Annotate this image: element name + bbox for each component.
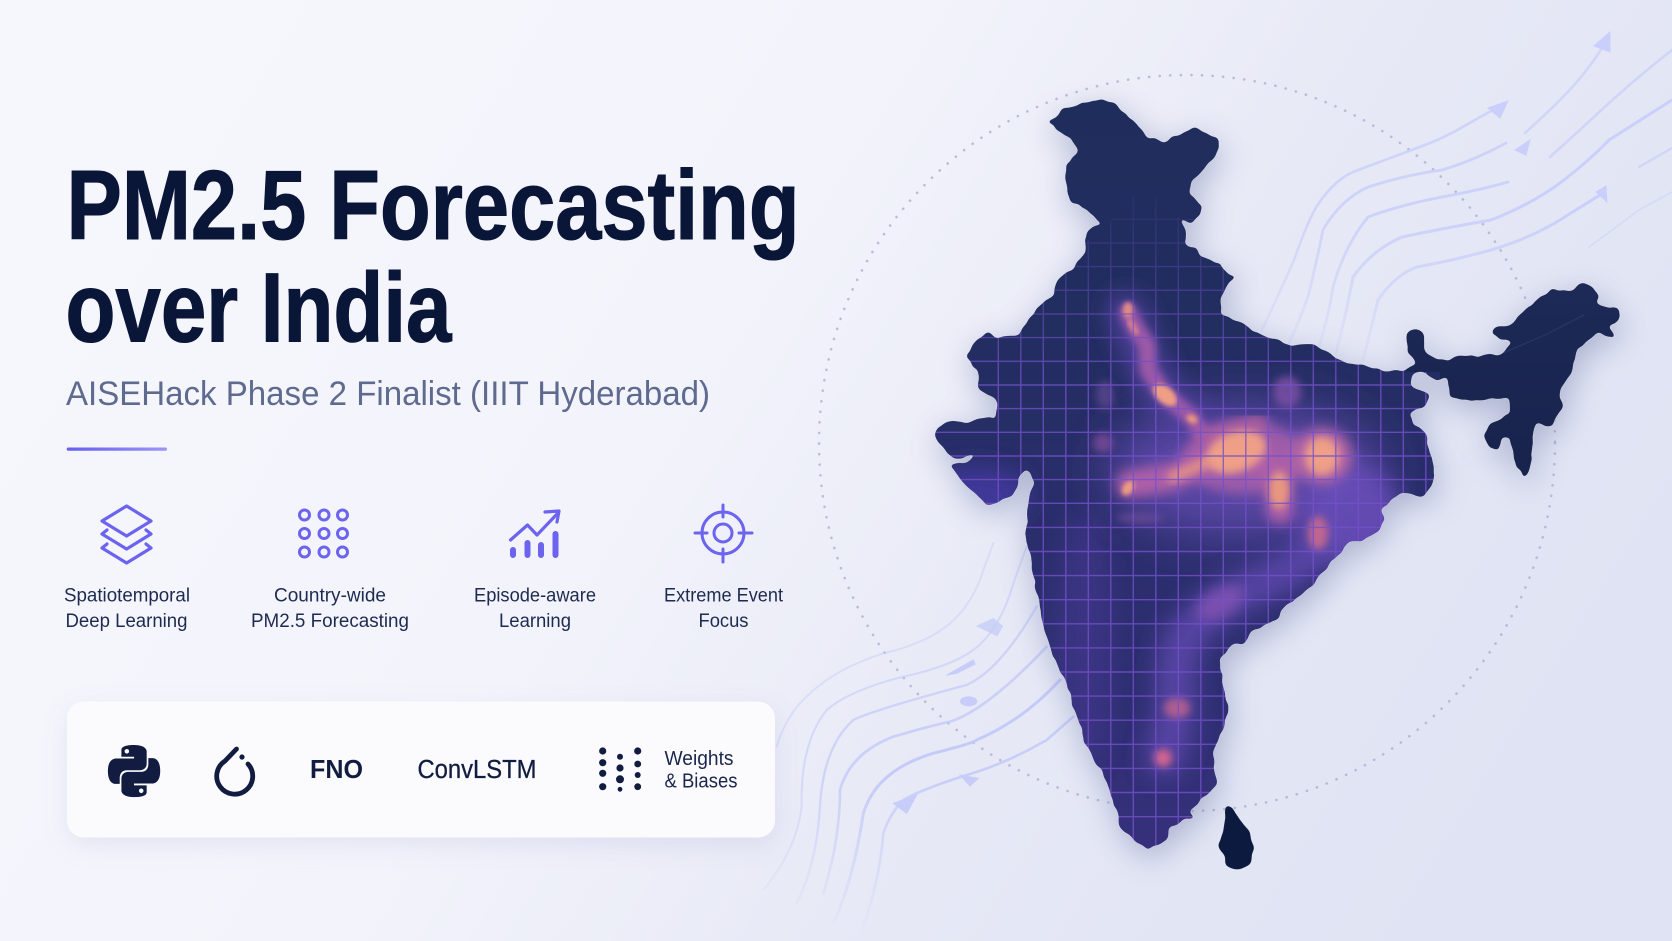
feature: episode-aware learning <box>474 511 596 632</box>
feature: spatiotemporal deep learning: Spatiotemporal <box>64 586 190 606</box>
label: weights and biases: & Biases <box>664 771 738 793</box>
feature: country-wide forecasting: PM2.5 Forecasting <box>251 611 409 632</box>
title <box>66 150 800 363</box>
map edge highlight <box>933 99 1620 850</box>
icon: stacked layers <box>102 506 151 563</box>
icon: rising chart <box>510 511 559 555</box>
feature: spatiotemporal deep learning <box>64 506 190 632</box>
dotted orbit circle <box>819 75 1555 811</box>
icon: python <box>108 745 160 797</box>
icon: weights and biases dots <box>599 747 641 792</box>
feature: extreme event focus: Focus <box>698 611 748 632</box>
feature: extreme event focus <box>664 505 784 632</box>
icon: dot grid <box>300 510 348 557</box>
label: weights and biases <box>664 748 738 793</box>
wind streamlines: south-west <box>763 543 1073 937</box>
Sri Lanka <box>1221 808 1254 869</box>
icon: pytorch <box>217 749 253 794</box>
map shadow <box>936 108 1623 859</box>
feature: country-wide forecasting: Country-wide <box>274 586 386 606</box>
accent rule <box>67 448 167 451</box>
north-east region <box>1406 284 1620 476</box>
feature: episode-aware learning: Episode-aware <box>474 586 596 606</box>
feature: extreme event focus: Extreme Event <box>664 586 784 606</box>
tools card <box>67 702 775 838</box>
subtitle: AISEHack Phase 2 Finalist (IIIT Hyderabad) <box>66 375 710 413</box>
feature: country-wide forecasting <box>251 510 409 632</box>
feature: spatiotemporal deep learning: Deep Learning <box>66 611 188 632</box>
wind streamlines: north-east <box>1262 32 1672 360</box>
icon: target <box>695 505 752 562</box>
grid <box>935 196 1434 846</box>
label: ConvLSTM: ConvLSTM <box>418 756 536 784</box>
title: over India <box>66 253 453 363</box>
title: PM2.5 Forecasting <box>66 150 800 260</box>
India PM2.5 heat map with grid <box>935 99 1620 849</box>
label: FNO: FNO <box>310 756 363 784</box>
heat field <box>920 302 1400 770</box>
feature: episode-aware learning: Learning <box>499 611 571 632</box>
label: weights and biases: Weights <box>664 748 734 770</box>
